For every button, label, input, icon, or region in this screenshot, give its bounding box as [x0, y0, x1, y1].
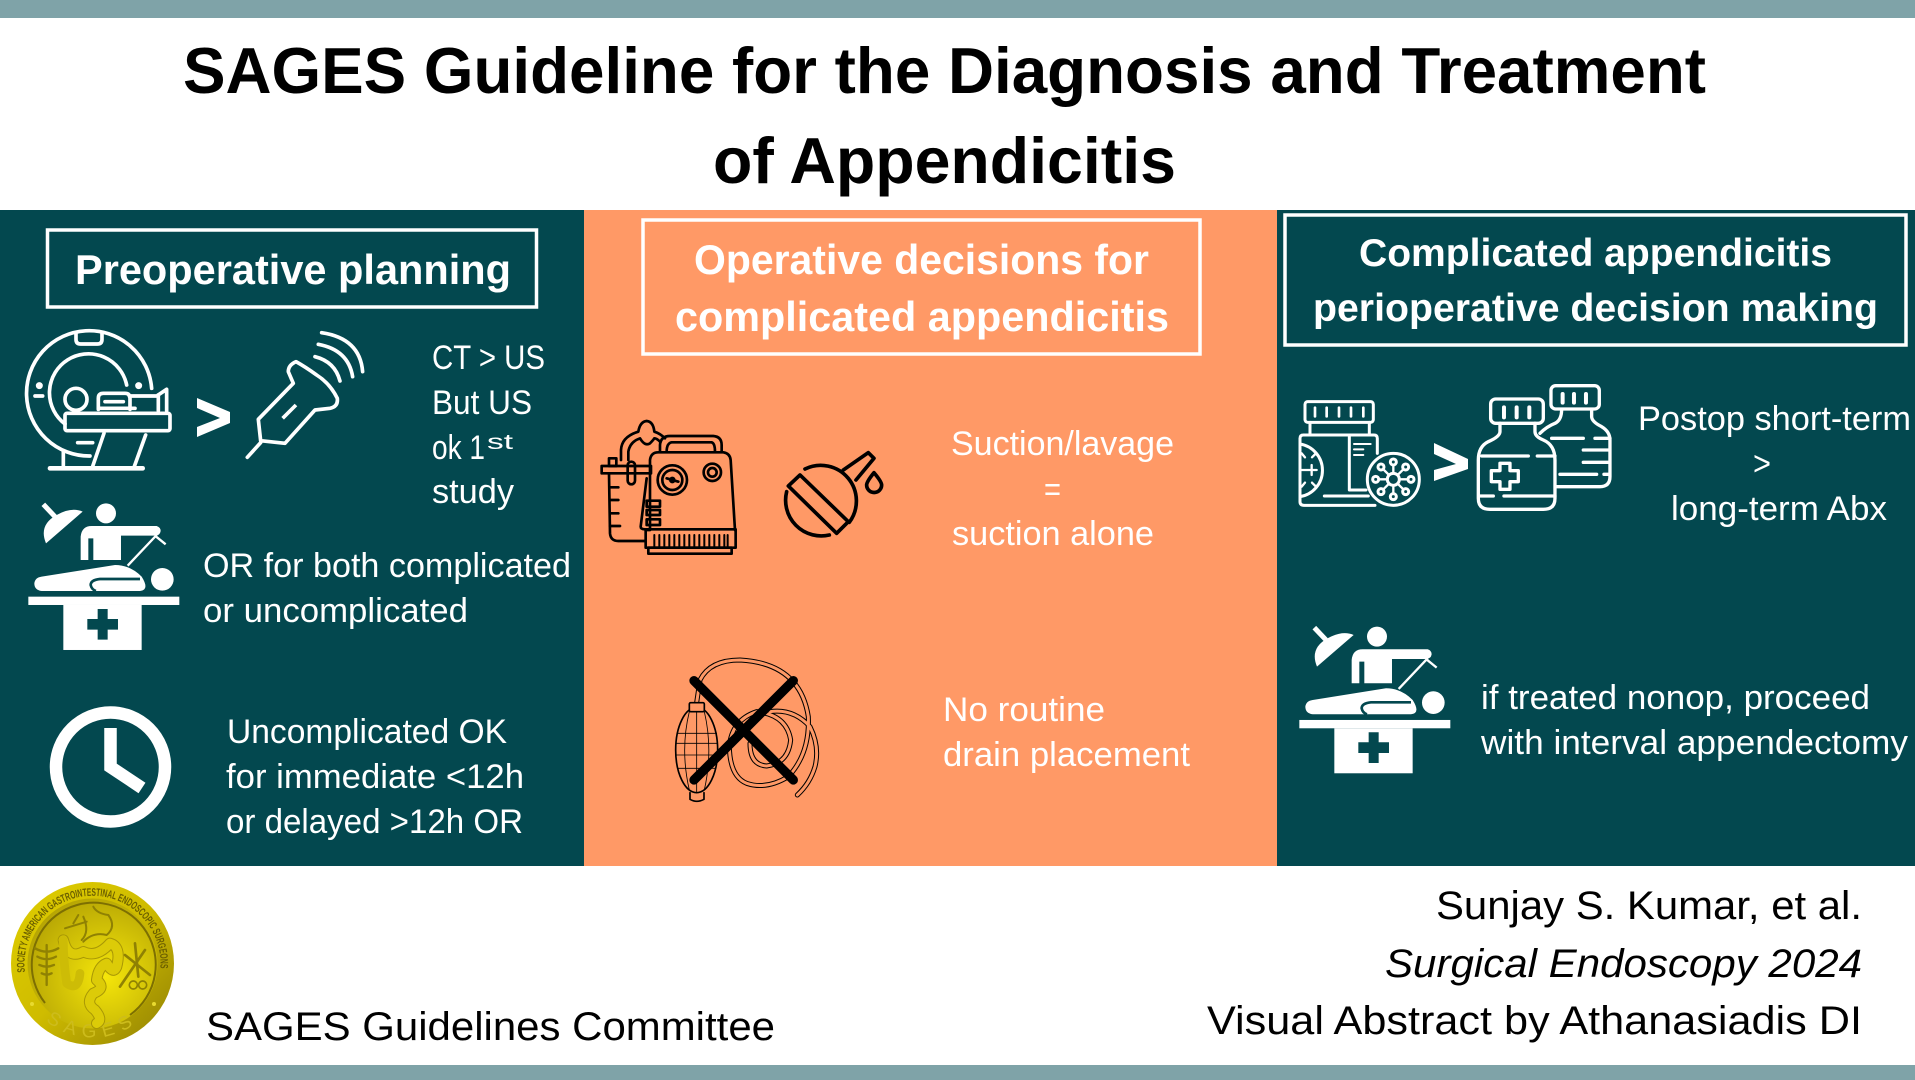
icon: greater than antibiotics	[1434, 443, 1468, 481]
icon: CT scanner	[27, 331, 170, 468]
text: SAGES Guidelines Committee: SAGES Guidelines Committee	[206, 1005, 775, 1049]
text: immediate or delayed: or delayed >12h OR	[226, 803, 523, 841]
text: suction lavage	[951, 425, 1174, 553]
icon: SAGES logo seal: SAGES	[48, 1012, 132, 1038]
text: interval appendectomy: if treated nonop, proceed	[1481, 679, 1870, 717]
text: immediate or delayed: for immediate <12h	[226, 758, 524, 796]
icon: surgeon operating	[1299, 627, 1450, 773]
text: no routine drain: drain placement	[943, 736, 1191, 774]
icon: irrigation bulb	[786, 453, 882, 536]
bottom band	[0, 1065, 1915, 1080]
icon: clock	[56, 712, 165, 822]
title	[183, 34, 1706, 197]
icon: greater than CT vs ultrasound	[197, 398, 230, 437]
icon: suction machine	[602, 421, 736, 554]
text: short-term versus long-term antibiotics: >	[1753, 445, 1771, 483]
title: SAGES Guideline for the Diagnosis and Treatment	[183, 34, 1706, 107]
text: OR for both	[203, 547, 571, 630]
heading: preoperative planning: Preoperative planning	[75, 246, 511, 293]
icon: ultrasound probe	[247, 333, 363, 457]
text: CT versus US	[432, 339, 545, 511]
text: citation: Visual Abstract by Athanasiadis DI	[1207, 999, 1862, 1043]
text: no routine drain: No routine	[943, 691, 1105, 729]
text: short-term versus long-term antibiotics: long-term Abx	[1671, 490, 1887, 528]
text: short-term versus long-term antibiotics	[1638, 400, 1911, 528]
panel: operative decisions	[584, 210, 1277, 866]
heading: preoperative planning	[48, 230, 536, 307]
icon: surgical drain crossed out	[676, 660, 817, 801]
text: CT versus US: st	[487, 431, 513, 454]
panel: preoperative planning	[0, 210, 584, 866]
text: interval appendectomy	[1480, 679, 1908, 762]
heading: operative decisions: Operative decisions for	[694, 236, 1149, 283]
text: CT versus US: But US	[432, 384, 532, 422]
text: citation	[1207, 884, 1862, 1043]
icon: SAGES logo seal	[11, 882, 174, 1045]
title: of Appendicitis	[713, 124, 1176, 197]
text: CT versus US: ok 1	[432, 429, 485, 467]
icon: short-term antibiotics bottles	[1478, 386, 1610, 509]
icon: long-term antibiotics bottle	[1300, 402, 1419, 505]
text: CT versus US: study	[432, 473, 514, 511]
text: immediate or delayed	[226, 713, 524, 841]
text: OR for both: or uncomplicated	[203, 592, 468, 630]
text: interval appendectomy: with interval appendectomy	[1480, 724, 1908, 762]
heading: complicated appendicitis perioperative decision making	[1285, 215, 1906, 345]
text: suction lavage: =	[1044, 471, 1061, 509]
panel: complicated appendicitis perioperative	[1277, 210, 1915, 866]
text: CT versus US: CT > US	[432, 339, 545, 377]
text: no routine drain	[943, 691, 1191, 774]
text: immediate or delayed: Uncomplicated OK	[227, 713, 507, 751]
text: suction lavage: suction alone	[952, 515, 1154, 553]
text: suction lavage: Suction/lavage	[951, 425, 1174, 463]
text: short-term versus long-term antibiotics: Postop short-term	[1638, 400, 1911, 438]
heading: operative decisions	[643, 220, 1200, 354]
heading: operative decisions: complicated appendicitis	[675, 293, 1169, 340]
text: citation: Sunjay S. Kumar, et al.	[1436, 884, 1862, 928]
text: OR for both: OR for both complicated	[203, 547, 571, 585]
icon: surgeon operating	[28, 503, 179, 650]
heading: complicated appendicitis perioperative decision making: perioperative decision making	[1313, 287, 1878, 330]
heading: complicated appendicitis perioperative decision making: Complicated appendicitis	[1359, 232, 1832, 275]
text: citation: Surgical Endoscopy 2024	[1385, 942, 1862, 986]
icon: SAGES logo seal: SOCIETY AMERICAN GASTROINTESTINAL ENDOSCOPIC SURGEONS	[16, 888, 168, 972]
top band	[0, 0, 1915, 18]
